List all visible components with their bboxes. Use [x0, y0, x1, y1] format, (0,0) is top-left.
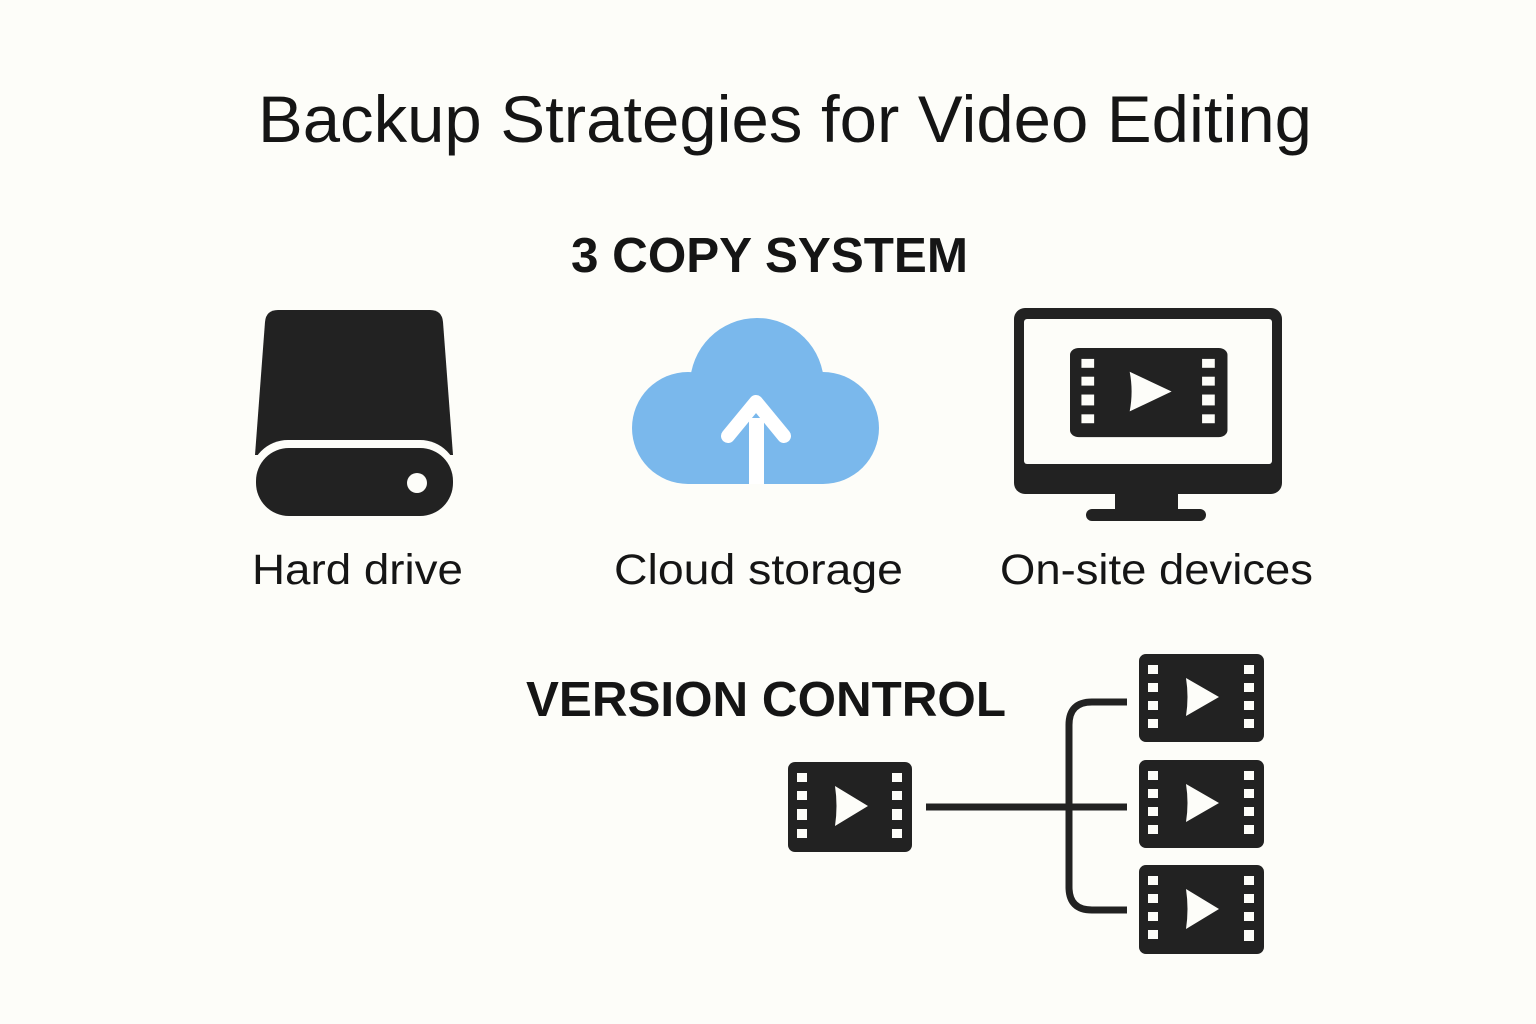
- icon: monitor: [1014, 308, 1282, 521]
- icon: cloud upload: [632, 318, 879, 484]
- connector lines: [926, 702, 1127, 910]
- heading: version control: VERSION CONTROL: [526, 673, 1006, 727]
- icon: version 1: [1139, 654, 1264, 742]
- label: on-site devices: On-site devices: [1000, 546, 1313, 594]
- icon: source video: [788, 762, 912, 852]
- icon: version 3: [1139, 865, 1264, 954]
- title: Backup Strategies for Video Editing: [258, 82, 1312, 156]
- label: hard drive: Hard drive: [252, 546, 463, 594]
- heading: 3 copy system: 3 COPY SYSTEM: [571, 229, 968, 283]
- icon: version 2: [1139, 760, 1264, 848]
- label: cloud storage: Cloud storage: [614, 546, 903, 594]
- icon: hard drive: [250, 310, 458, 520]
